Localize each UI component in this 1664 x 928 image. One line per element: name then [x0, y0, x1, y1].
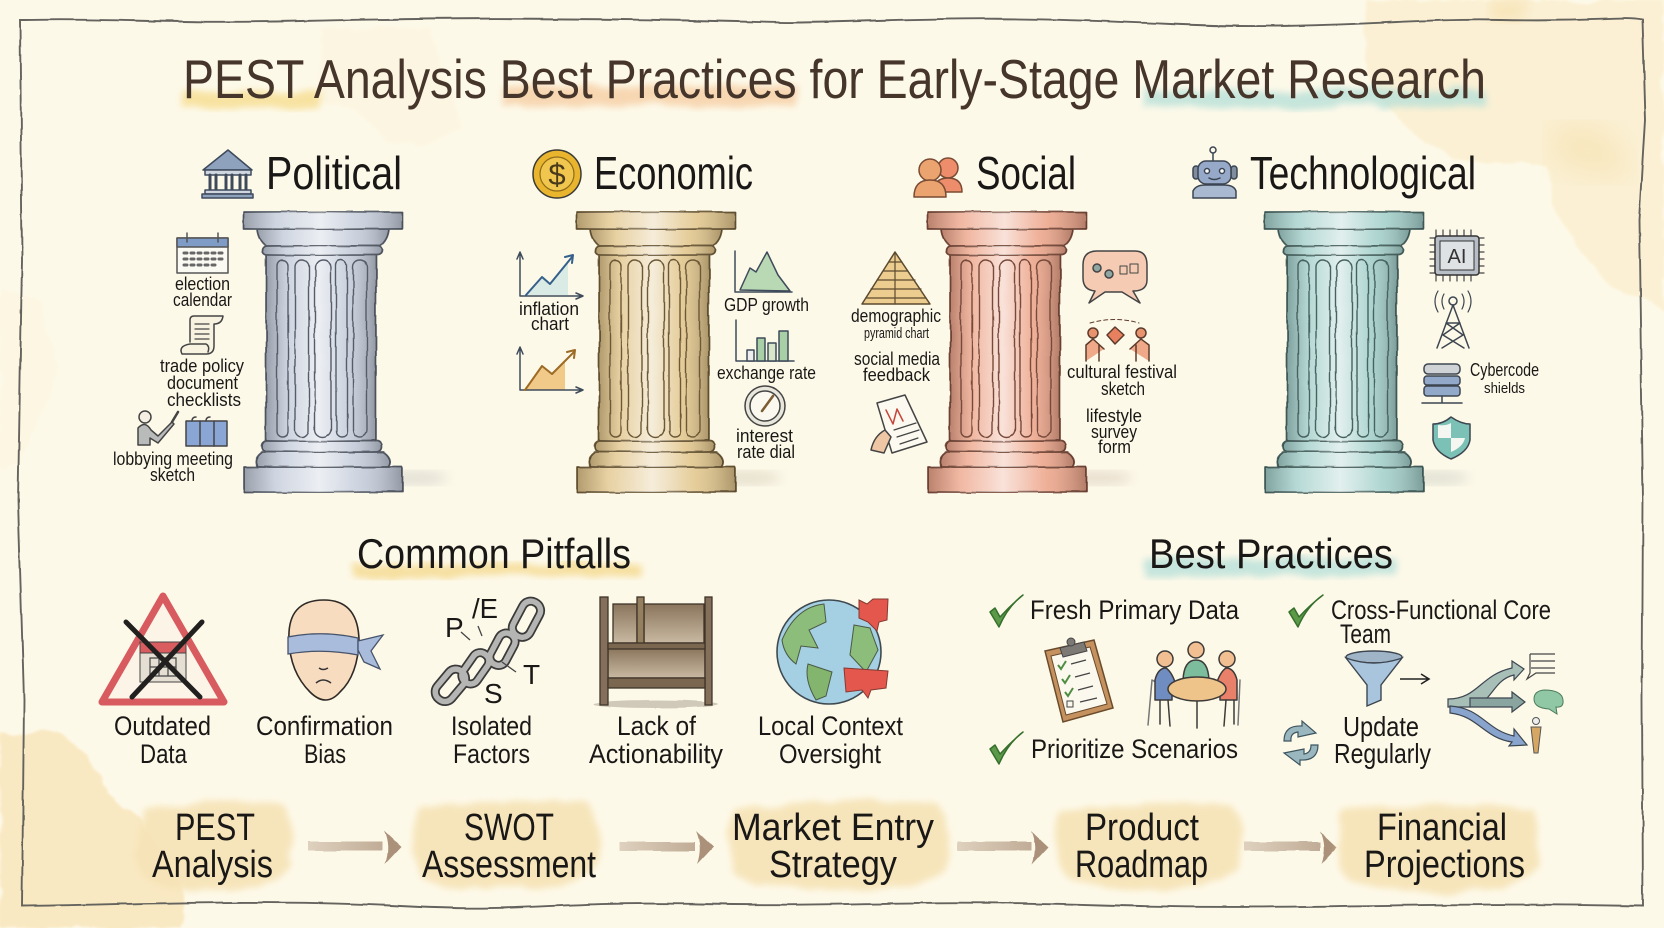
label: Oversight: [779, 739, 881, 769]
text: election calendar: [173, 274, 232, 310]
heading: common pitfalls: Common Pitfalls: [357, 530, 631, 577]
text: trade policy document checklists: document: [167, 373, 238, 393]
step: swot assessment: Assessment: [422, 844, 596, 886]
label: Outdated: [114, 711, 211, 741]
icon: exchange rate bars: [736, 320, 794, 361]
step: pest analysis: [135, 802, 292, 890]
icon: broken chain: /E: [472, 593, 498, 624]
text: lifestyle survey form: form: [1098, 437, 1131, 457]
text: social media feedback: [854, 349, 941, 385]
pitfall: local context oversight: [758, 599, 903, 769]
icon: check: [990, 732, 1023, 764]
label: [256, 711, 393, 769]
text: interest rate dial: [736, 426, 795, 462]
icon: demographic pyramid: [862, 252, 930, 304]
icon: survey form in hand: [871, 395, 927, 453]
icon: speech comment: [1527, 654, 1555, 679]
text: election calendar: election: [175, 274, 230, 294]
economic heading: Economic: [594, 147, 753, 199]
icon: scroll: [181, 316, 223, 354]
item: cross-functional team: [1289, 595, 1551, 649]
arrow: [308, 831, 401, 864]
pillar column: [1265, 212, 1469, 492]
pitfall: outdated data: [102, 596, 224, 769]
pillar column: [577, 212, 781, 492]
icon: broken chain: T: [523, 659, 540, 690]
pillar column: [244, 212, 448, 492]
political heading: [202, 147, 402, 199]
step: financial projections: Financial: [1377, 807, 1507, 849]
icon: rising chart: [517, 347, 583, 393]
icon: refresh cycle: [1284, 721, 1318, 765]
arrow: [1244, 831, 1337, 864]
label: Factors: [453, 739, 530, 769]
icon: AI chip: [1430, 230, 1484, 281]
text: lobbying meeting sketch: sketch: [150, 465, 195, 485]
item: cross-functional team: Cross-Functional Core: [1331, 595, 1551, 625]
icon: inflation chart: [517, 252, 583, 299]
text: lobbying meeting sketch: lobbying meeting: [113, 449, 233, 469]
step: product roadmap: Product: [1085, 807, 1199, 849]
pitfall: isolated factors: [432, 593, 544, 769]
text: interest rate dial: rate dial: [737, 442, 795, 462]
step: swot assessment: [413, 801, 602, 888]
icon: broken chain: S: [484, 678, 503, 709]
icon: speech bubble: [1083, 251, 1147, 303]
step: pest analysis: Analysis: [152, 844, 273, 886]
economic heading: [533, 147, 753, 199]
text: demographic pyramid: demographic: [851, 306, 941, 326]
panel: best practices: [990, 530, 1563, 769]
panel: economic pillar: [517, 147, 816, 492]
text: cybersecurity: [1470, 360, 1539, 397]
panel: workflow: [135, 801, 1539, 892]
icon: branching arrows: [1448, 661, 1527, 746]
icon: broken chain: P: [445, 612, 464, 643]
text: cultural festival sketch: sketch: [1101, 379, 1145, 399]
text: demographic pyramid: pyramid chart: [864, 325, 930, 342]
icon: empty shelf: [594, 597, 718, 708]
step: financial projections: [1336, 804, 1539, 892]
label: [589, 711, 723, 769]
item: prioritize scenarios: Prioritize Scenarios: [1031, 734, 1238, 764]
technological heading: [1193, 147, 1476, 199]
step: market entry strategy: Market Entry: [732, 807, 934, 849]
icon: check: [1289, 595, 1323, 627]
text: trade policy document checklists: trade policy: [160, 356, 244, 376]
panel: common pitfalls: [102, 530, 903, 769]
label: Local Context: [758, 711, 903, 741]
technological heading: Technological: [1250, 147, 1476, 199]
icon: green chat blob: [1534, 690, 1563, 714]
pitfall: lack of actionability: [589, 597, 723, 769]
text: exchange rate: exchange rate: [717, 363, 816, 383]
text: cybersecurity: Cybercode: [1470, 360, 1539, 380]
item: cross-functional team: Team: [1340, 619, 1391, 649]
political heading: Political: [266, 147, 402, 199]
step: product roadmap: Roadmap: [1075, 844, 1208, 886]
text: demographic pyramid: [851, 306, 941, 342]
text: social media feedback: feedback: [863, 365, 931, 385]
label: Bias: [304, 739, 346, 769]
item: update regularly: Regularly: [1334, 738, 1431, 769]
social heading: [914, 147, 1076, 199]
icon: small person: [1531, 718, 1541, 753]
icon: blindfolded head: [288, 600, 383, 700]
text: election calendar: calendar: [173, 290, 232, 310]
text: trade policy document checklists: checklists: [167, 390, 241, 410]
icon: people: [914, 158, 962, 197]
social heading: Social: [976, 147, 1076, 199]
panel: technological pillar: [1193, 147, 1539, 492]
label: [758, 711, 903, 769]
text: cybersecurity: shields: [1484, 380, 1525, 397]
icon: check: [990, 595, 1023, 627]
icon: team at table: [1148, 642, 1240, 728]
icon: crossed out calendar warning: [102, 596, 224, 702]
icon: funnel with arrow: [1346, 651, 1429, 706]
text: lifestyle survey form: [1086, 406, 1142, 457]
pitfall: confirmation bias: [256, 600, 393, 769]
icon: calendar: [177, 233, 228, 273]
icon: signal tower: [1435, 291, 1471, 348]
icon: coin: $: [548, 157, 566, 192]
text: inflation chart: chart: [531, 314, 569, 334]
text: lifestyle survey form: survey: [1091, 422, 1137, 442]
text: GDP growth: GDP growth: [724, 295, 809, 315]
step: financial projections: Projections: [1364, 844, 1525, 886]
text: lifestyle survey form: lifestyle: [1086, 406, 1142, 426]
icon: shield: [1433, 417, 1470, 459]
icon: AI chip: AI: [1448, 246, 1466, 268]
panel: political pillar: [113, 147, 448, 492]
icon: servers: [1422, 364, 1462, 403]
label: Confirmation: [256, 711, 393, 741]
step: product roadmap: [1055, 803, 1242, 889]
pillar column: [928, 212, 1132, 492]
title highlights: [184, 86, 1485, 107]
item: update regularly: Update: [1343, 711, 1419, 742]
icon: globe with red markers: [777, 599, 888, 704]
icon: GDP growth chart: [735, 251, 792, 292]
step: market entry strategy: Strategy: [769, 844, 897, 886]
icon: interest rate dial: [745, 386, 785, 426]
item: fresh primary data: Fresh Primary Data: [1030, 595, 1240, 625]
label: Data: [140, 739, 188, 769]
icon: robot: [1193, 147, 1237, 198]
icon: cultural festival: [1086, 320, 1149, 361]
label: Lack of: [617, 711, 696, 741]
icon: coin: [533, 150, 581, 198]
text: inflation chart: [519, 299, 579, 334]
text: cultural festival sketch: [1067, 362, 1177, 399]
item: update regularly: [1334, 711, 1431, 769]
step: market entry strategy: [727, 801, 950, 889]
label: [114, 711, 211, 769]
text: interest rate dial: interest: [736, 426, 793, 446]
label: Actionability: [589, 739, 723, 769]
text: trade policy document checklists: [160, 356, 244, 410]
text: inflation chart: inflation: [519, 299, 579, 319]
icon: clipboard checklist: [1045, 638, 1113, 722]
heading: best practices: Best Practices: [1149, 530, 1393, 577]
icon: lobbying person and board: [138, 411, 227, 446]
panel: social pillar: [851, 147, 1177, 492]
arrow: [957, 831, 1048, 864]
text: social media feedback: social media: [854, 349, 941, 369]
icon: government building: [202, 150, 253, 198]
label: Isolated: [451, 711, 532, 741]
text: cultural festival sketch: cultural festival: [1067, 362, 1177, 382]
step: swot assessment: SWOT: [464, 807, 554, 849]
icon: broken chain: [432, 593, 544, 709]
step: pest analysis: PEST: [175, 807, 255, 849]
arrow: [619, 831, 713, 864]
text: lobbying meeting sketch: [113, 449, 233, 485]
label: [451, 711, 532, 769]
